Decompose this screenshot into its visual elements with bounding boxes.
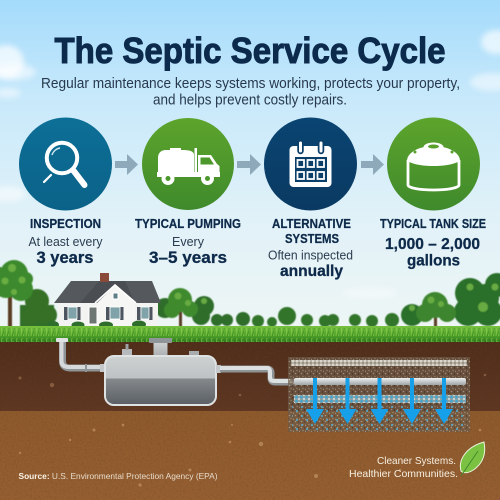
grass strip [0,326,500,342]
gravel bed [288,357,470,432]
icon: leaf [460,442,485,476]
right trees [401,273,500,327]
background trees [0,260,500,327]
dispersal water band [292,395,466,432]
tank body [105,356,216,405]
septic tank system [56,338,295,405]
source credit: Source: U.S. Environmental Protection Agency (EPA) [18,471,218,481]
subtitle: and helps prevent costly repairs. [153,92,347,108]
title: The Septic Service Cycle [54,30,446,71]
step 2: typical pumping [135,118,241,267]
arrow: step 2 to 3 [237,154,261,175]
label: typical pumping: Every [172,235,205,249]
label: alternative systems: SYSTEMS [285,232,339,246]
distribution pipe [294,378,466,385]
tagline [349,455,458,480]
label: inspection: At least every [28,235,103,249]
icon: calendar [264,118,357,210]
icon: magnifying glass [19,118,112,210]
light subsoil layer [0,411,500,500]
icon: pump truck [142,118,234,210]
icon: tank [387,118,480,210]
clouds [0,30,500,299]
inlet pipe [56,338,105,372]
gravel top band [291,360,467,366]
label: typical tank size [380,217,486,270]
label: inspection: 3 years [36,249,94,267]
blue flow arrows [306,378,453,424]
label: typical tank size: gallons [407,252,460,270]
left trees [0,260,57,327]
trees right of house [155,288,250,327]
label: typical tank size: TYPICAL TANK SIZE [380,217,486,231]
label: alternative systems: Often inspected [268,248,353,262]
dark topsoil layer [0,341,500,411]
label: inspection: INSPECTION [30,217,101,231]
label: alternative systems [268,217,353,280]
tagline: Healthier Communities. [349,468,458,480]
label: alternative systems: annually [280,263,343,280]
label: typical pumping: TYPICAL PUMPING [135,217,241,231]
drain field [288,357,470,432]
label: inspection [28,217,103,267]
soil texture [0,341,500,500]
subtitle [41,76,460,108]
small tree row [252,307,399,327]
step 1: inspection [19,118,112,267]
label: typical tank size: 1,000 – 2,000 [385,236,480,253]
step 3: alternative systems [264,118,357,280]
soil pebbles [18,374,486,487]
sky background [0,0,500,330]
step 4: typical tank size [380,118,486,270]
tank risers [122,338,199,357]
arrow: step 1 to 2 [115,154,138,175]
label: typical pumping: 3–5 years [149,249,227,267]
house [47,273,161,329]
arrow: step 3 to 4 [361,154,384,175]
label: typical pumping [135,217,241,267]
outlet pipe [216,365,295,382]
subtitle: Regular maintenance keeps systems working, protects your property, [41,76,460,92]
label: alternative systems: ALTERNATIVE [272,217,351,231]
tagline: Cleaner Systems. [377,455,456,467]
